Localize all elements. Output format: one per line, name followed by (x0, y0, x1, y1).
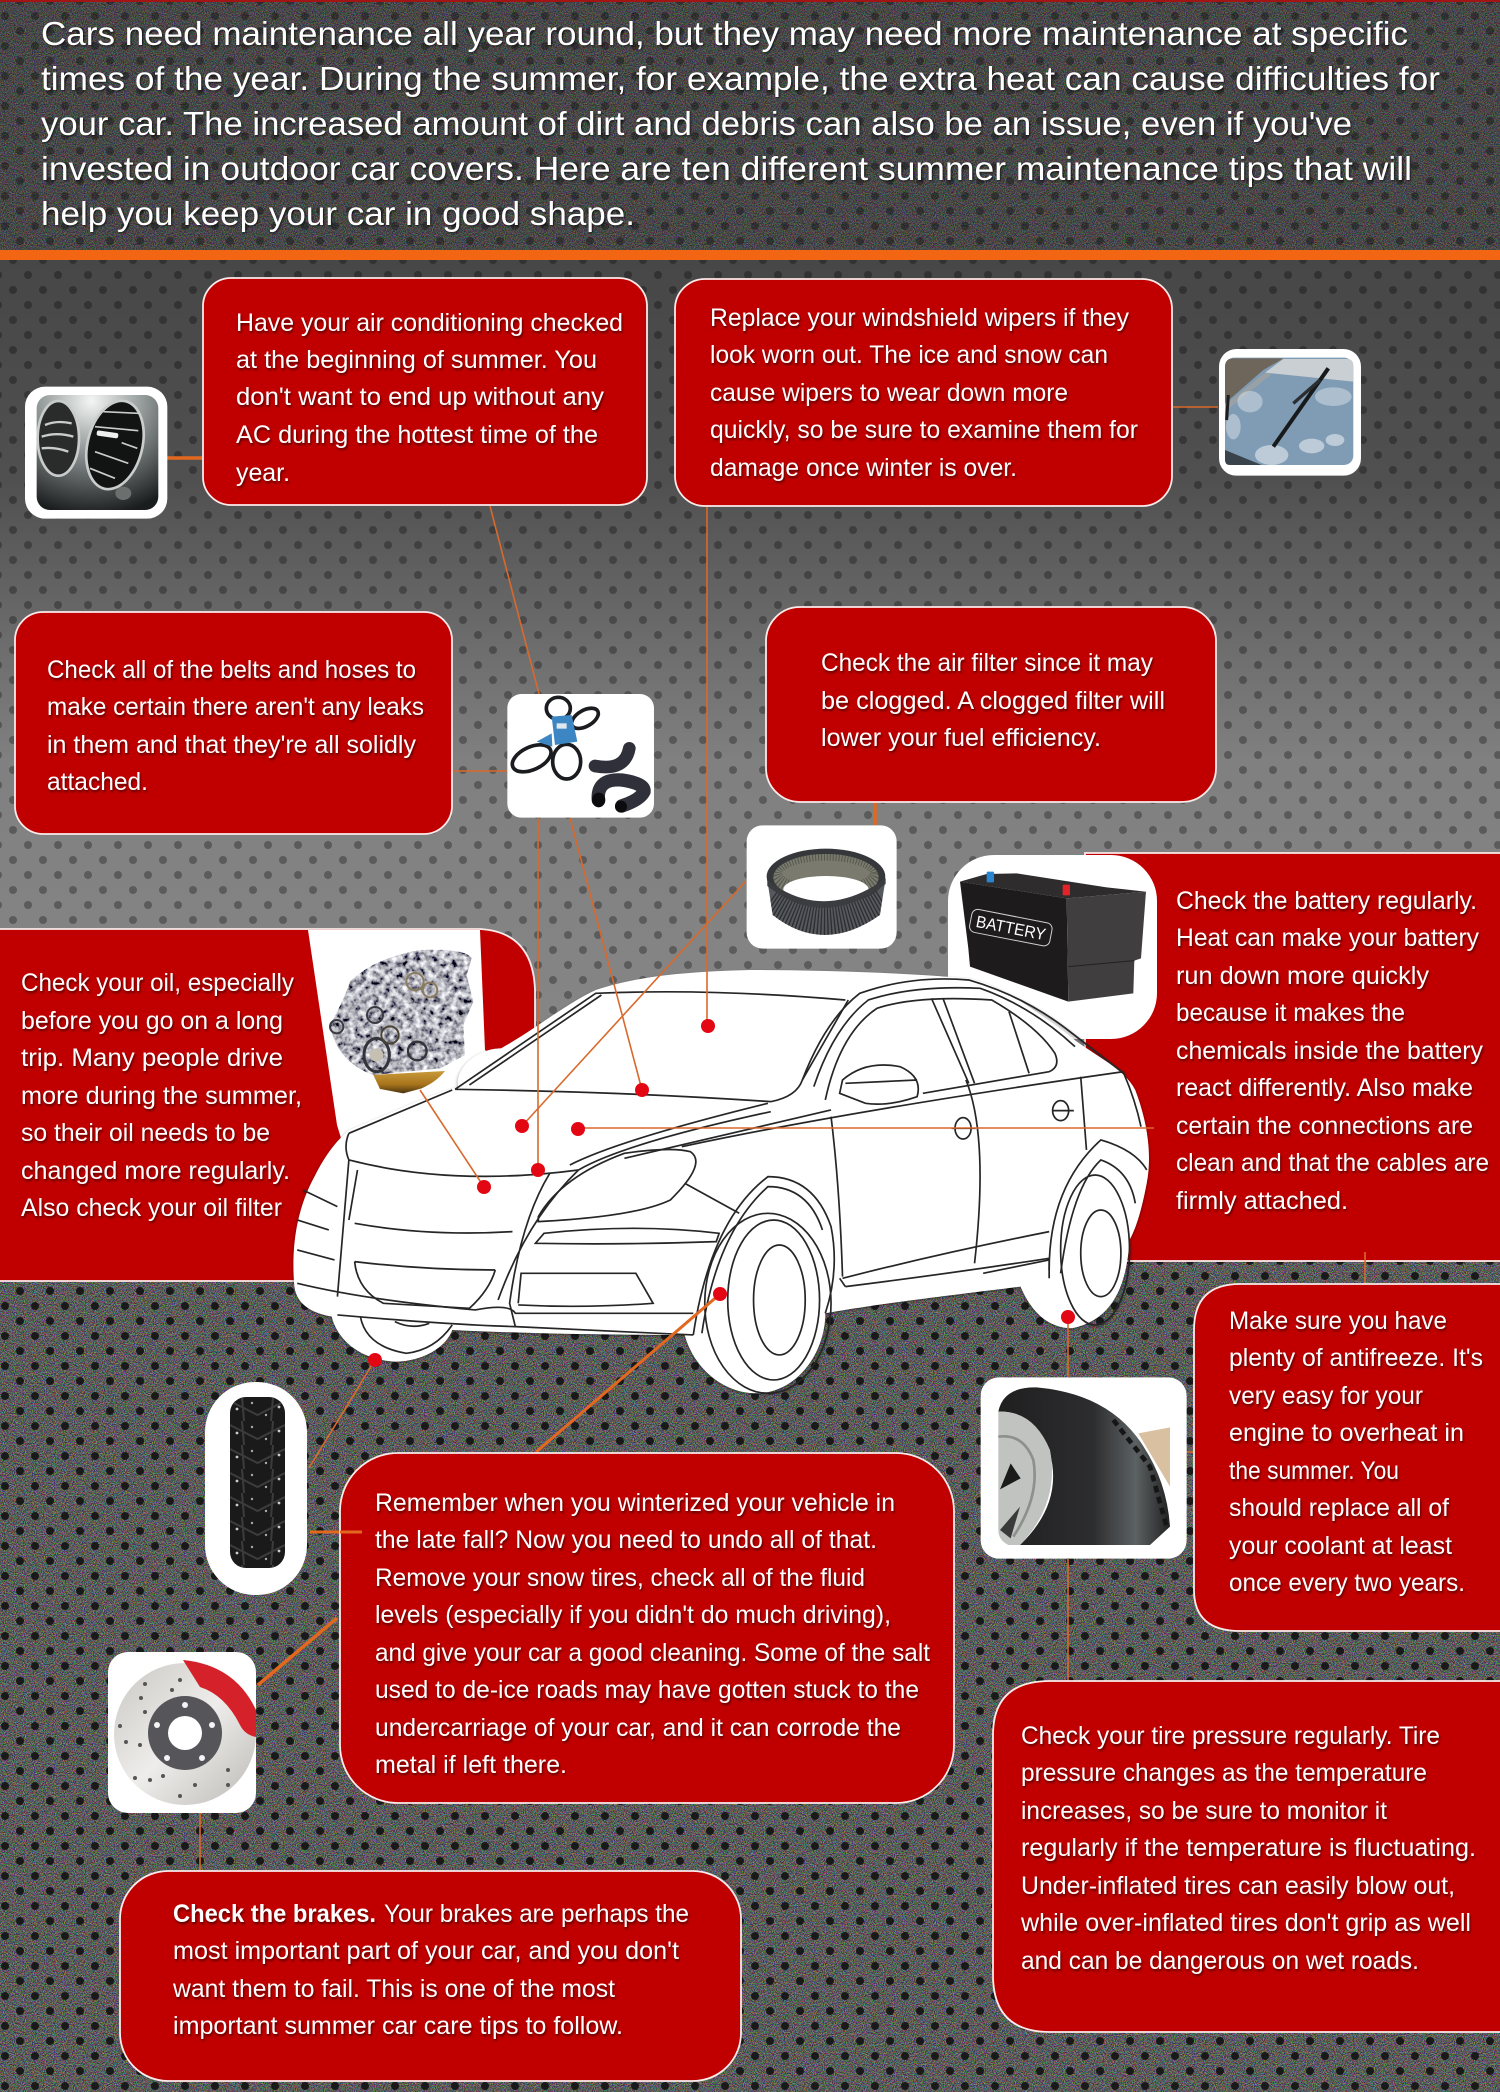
panel: tire pressure: and can be dangerous on wet roads. (1021, 1947, 1419, 1975)
icon: tire close-up (981, 1377, 1187, 1559)
panel: winterizing: levels (especially if you didn't do much driving), (375, 1601, 891, 1629)
panel: winterizing: and give your car a good cleaning. Some of the salt (375, 1639, 930, 1667)
panel: winterizing: metal if left there. (375, 1751, 567, 1779)
panel: battery (behind car) (948, 853, 1500, 1261)
panel: air conditioning: year. (236, 459, 290, 487)
panel: air conditioning (203, 278, 647, 505)
panel: air filter: be clogged. A clogged filter will (821, 687, 1165, 715)
panel: winterizing: the late fall? Now you need to undo all of that. (375, 1526, 877, 1554)
icon: belts and hoses (507, 694, 654, 818)
intro text: times of the year. During the summer, for example, the extra heat can cause difficulties for (41, 60, 1440, 97)
panel: air conditioning: don't want to end up without any (236, 383, 605, 411)
panel: tire pressure (993, 1681, 1500, 2032)
panel: antifreeze: should replace all of (1229, 1494, 1449, 1522)
panel: tire pressure: while over-inflated tires don't grip as well (1020, 1909, 1471, 1937)
panel: tire pressure: regularly if the temperature is fluctuating. (1021, 1834, 1476, 1862)
panel: tire pressure: pressure changes as the temperature (1021, 1759, 1427, 1787)
panel: air conditioning: Have your air conditioning checked (236, 309, 623, 337)
panel: antifreeze: plenty of antifreeze. It's (1229, 1344, 1483, 1372)
panel: winterizing: used to de-ice roads may have gotten stuck to the (375, 1676, 919, 1704)
panel: antifreeze: very easy for your (1229, 1382, 1423, 1410)
panel: winterizing (340, 1453, 954, 1803)
icon: brake disc (108, 1652, 256, 1813)
icon: studded snow tire (205, 1382, 307, 1595)
panel: air filter: Check the air filter since it may (821, 649, 1153, 677)
panel: windshield wipers: Replace your windshield wipers if they (710, 304, 1129, 332)
panel: windshield wipers: damage once winter is over. (710, 454, 1017, 482)
panel: battery (behind car): clean and that the cables are (1176, 1149, 1489, 1177)
panel: battery (behind car): firmly attached. (1176, 1187, 1348, 1215)
panel: oil (behind car) (0, 929, 535, 1281)
icon: air filter (747, 825, 897, 949)
panel: antifreeze: your coolant at least (1229, 1532, 1452, 1560)
panel: winterizing: Remove your snow tires, check all of the fluid (375, 1564, 865, 1592)
panel: brakes: Check the brakes. (173, 1900, 376, 1928)
panel: oil (behind car): before you go on a long (21, 1007, 283, 1035)
icon: wiper (1219, 349, 1361, 476)
panel: oil (behind car): trip. Many people drive (21, 1044, 283, 1072)
panel: battery (behind car): run down more quickly (1176, 962, 1429, 990)
panel: tire pressure: Check your tire pressure regularly. Tire (1021, 1722, 1440, 1750)
panel: battery (behind car): certain the connections are (1176, 1112, 1473, 1140)
icon: air vents (25, 387, 167, 519)
car illustration (293, 970, 1149, 1393)
white battery backing (948, 855, 1157, 1039)
panel: battery (behind car): because it makes the (1176, 999, 1405, 1027)
panel: oil (behind car): Check your oil, especially (21, 969, 294, 997)
panel: antifreeze (1194, 1284, 1500, 1631)
panel: air conditioning: at the beginning of summer. You (236, 346, 597, 374)
panel: brakes: Your brakes are perhaps the (384, 1900, 689, 1928)
panel: belts and hoses: make certain there aren't any leaks (47, 693, 424, 721)
panel: winterizing: undercarriage of your car, and it can corrode the (375, 1714, 901, 1742)
panel: belts and hoses: attached. (47, 768, 148, 796)
panel: tire pressure: Under-inflated tires can easily blow out, (1021, 1872, 1455, 1900)
connector lines (167, 407, 1365, 1871)
intro text: help you keep your car in good shape. (41, 195, 635, 232)
panel: brakes: want them to fail. This is one of the most (172, 1975, 615, 2003)
panel: oil (behind car): changed more regularly. (21, 1157, 290, 1185)
intro text (41, 15, 1440, 232)
red marker dots on car (368, 1019, 1075, 1367)
intro text: invested in outdoor car covers. Here are ten different summer maintenance tips that will (41, 150, 1412, 187)
intro text: Cars need maintenance all year round, but they may need more maintenance at specific (41, 15, 1408, 52)
panel: air conditioning: AC during the hottest time of the (236, 421, 598, 449)
panel: air filter (766, 607, 1216, 802)
panel: antifreeze: the summer. You (1229, 1457, 1399, 1485)
panel: battery (behind car): Check the battery regularly. (1176, 887, 1477, 915)
panel: antifreeze: engine to overheat in (1229, 1419, 1464, 1447)
panel: windshield wipers: look worn out. The ice and snow can (710, 341, 1108, 369)
panel: oil (behind car): so their oil needs to be (21, 1119, 270, 1147)
panel: windshield wipers: cause wipers to wear down more (710, 379, 1068, 407)
panel: belts and hoses (15, 612, 452, 834)
panel: tire pressure: increases, so be sure to monitor it (1021, 1797, 1387, 1825)
panel: battery (behind car): react differently. Also make (1176, 1074, 1473, 1102)
panel: oil (behind car): more during the summer, (21, 1082, 302, 1110)
panel: battery (behind car): Heat can make your battery (1176, 924, 1479, 952)
panel: antifreeze: once every two years. (1229, 1569, 1465, 1597)
panel: antifreeze: Make sure you have (1229, 1307, 1447, 1335)
panel: brakes: most important part of your car, and you don't (173, 1937, 679, 1965)
panel: brakes: important summer car care tips to follow. (173, 2012, 623, 2040)
white engine backing (308, 930, 520, 1200)
icon: engine (330, 950, 473, 1093)
orange divider bar (0, 250, 1500, 260)
panel: winterizing: Remember when you winterized your vehicle in (375, 1489, 895, 1517)
panel: belts and hoses: Check all of the belts and hoses to (47, 656, 416, 684)
panel: windshield wipers (675, 279, 1172, 506)
intro text: your car. The increased amount of dirt and debris can also be an issue, even if you've (41, 105, 1352, 142)
panel: oil (behind car): Also check your oil filter (21, 1194, 282, 1222)
panel: windshield wipers: quickly, so be sure to examine them for (710, 416, 1138, 444)
panel: battery (behind car): chemicals inside the battery (1176, 1037, 1483, 1065)
panel: brakes (120, 1871, 741, 2081)
panel: belts and hoses: in them and that they're all solidly (47, 731, 416, 759)
icon: battery: BATTERY (974, 912, 1047, 944)
panel: air filter: lower your fuel efficiency. (821, 724, 1101, 752)
icon: battery (960, 872, 1146, 1002)
